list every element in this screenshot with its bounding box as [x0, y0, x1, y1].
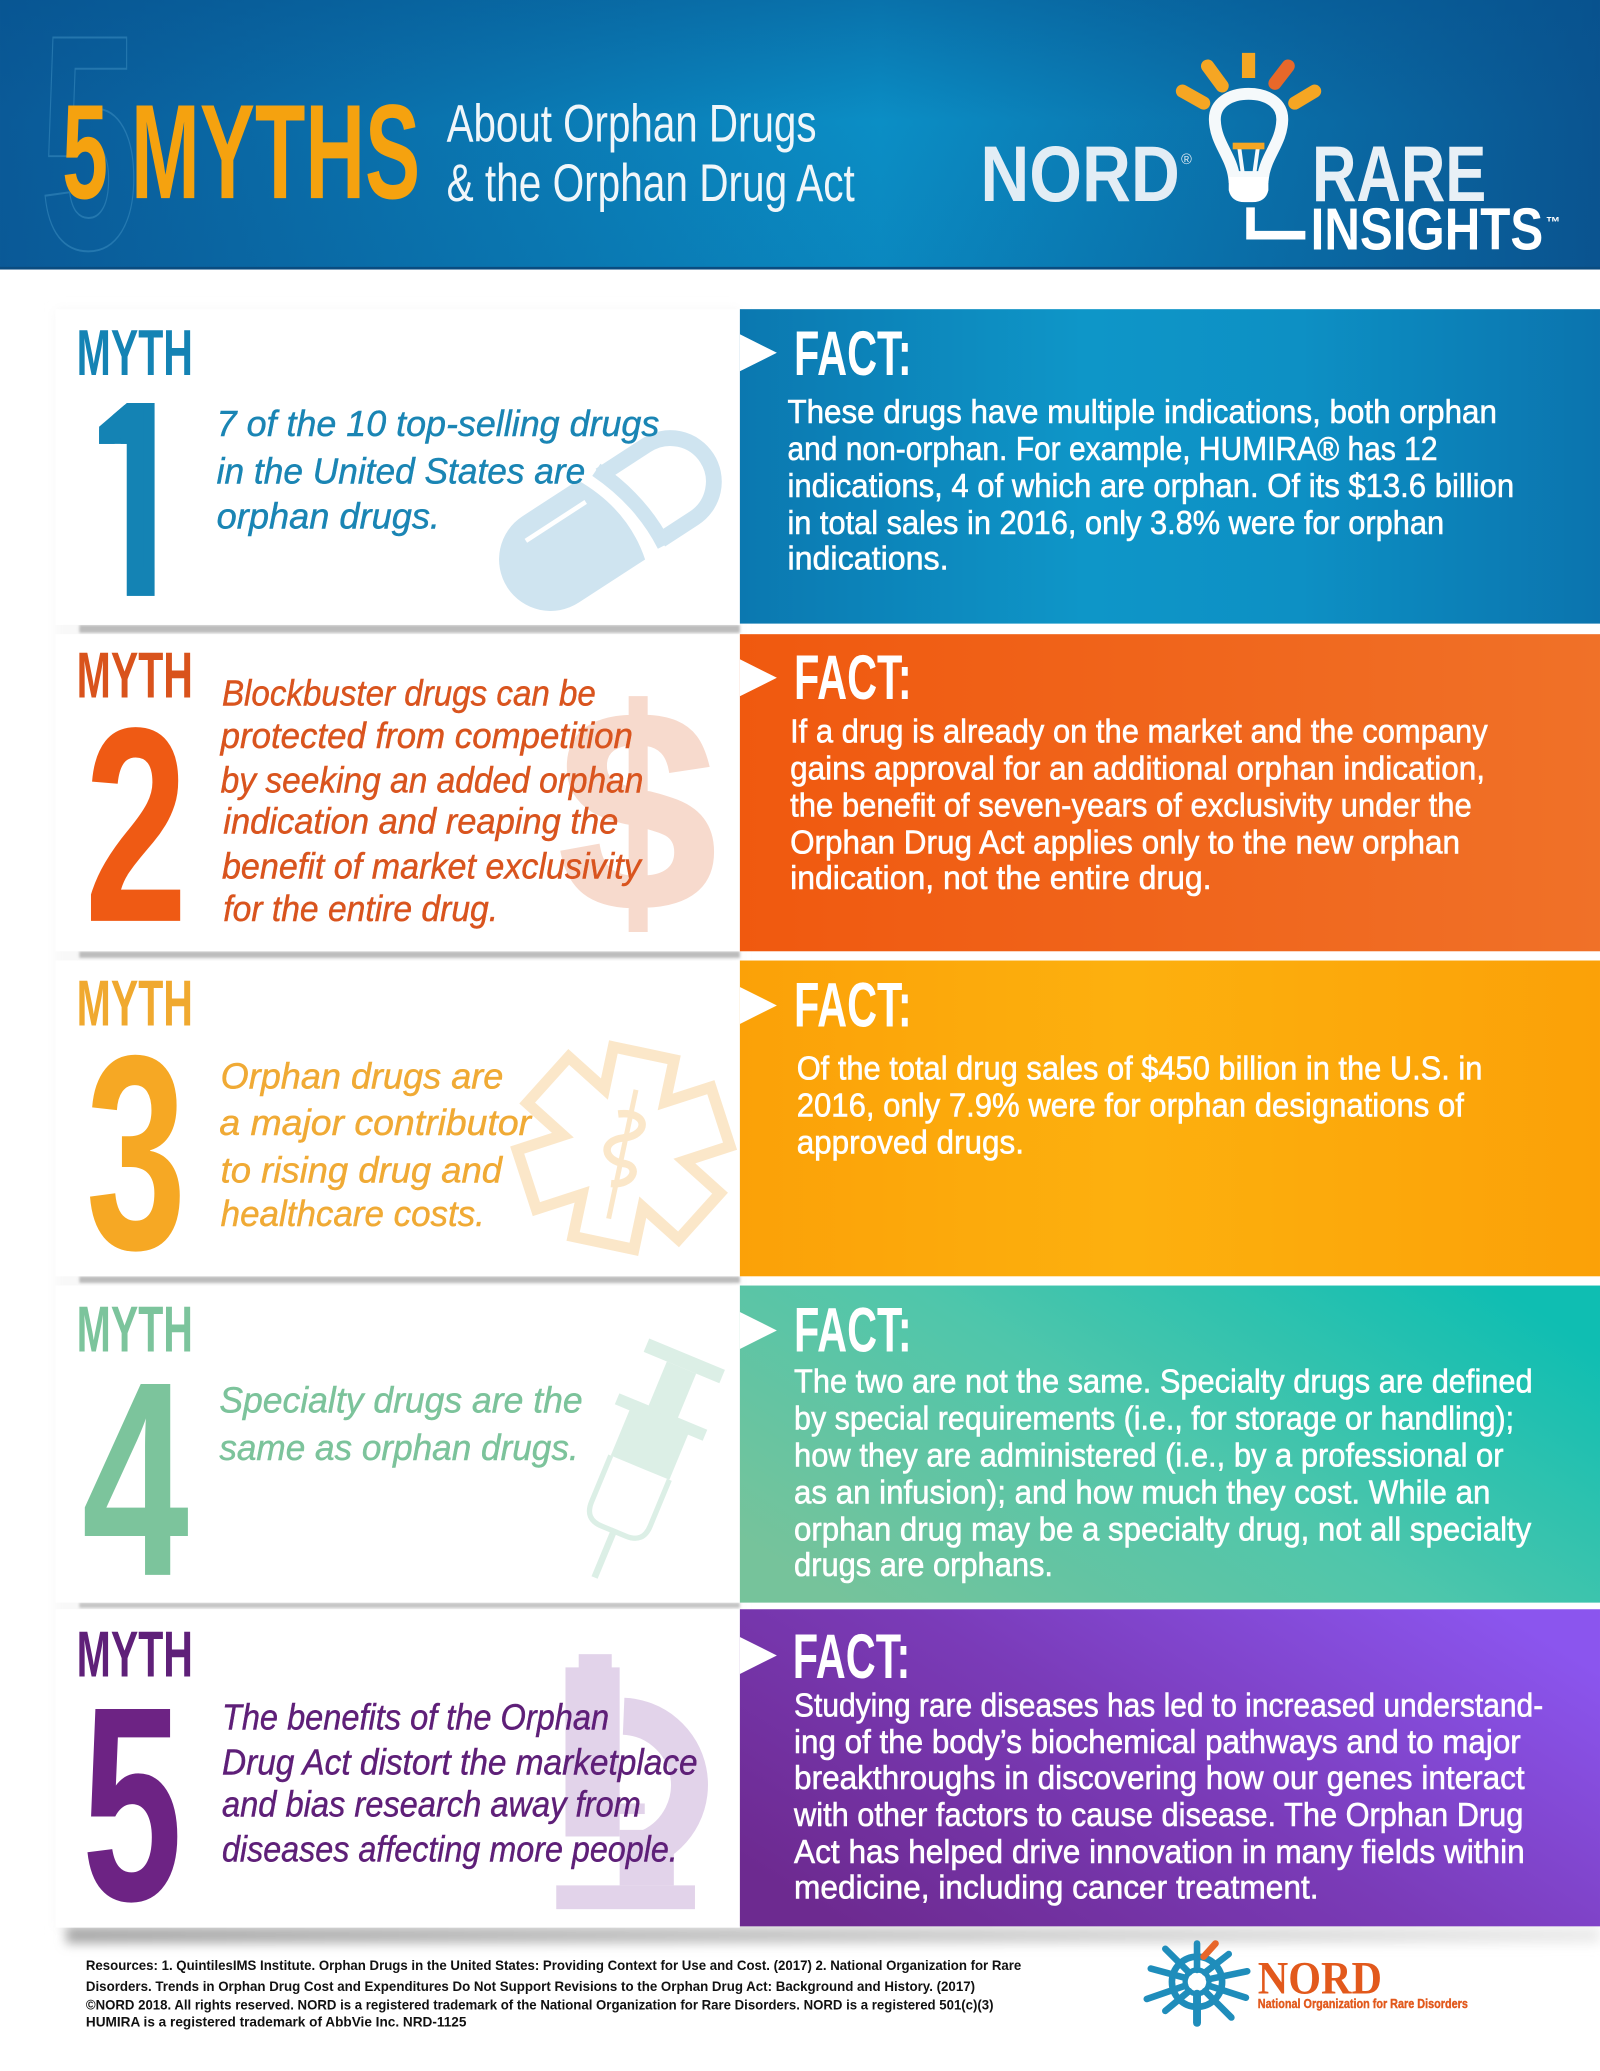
panel: myth 5 — [55, 1609, 740, 1959]
fact text: with other factors to cause disease. The Orphan Drug — [793, 1796, 1523, 1833]
myth text: healthcare costs. — [221, 1194, 485, 1234]
myth text — [222, 1697, 698, 1870]
number 3: 3 — [86, 998, 186, 1308]
fact heading: FACT: — [794, 319, 912, 389]
myth text: a major contributor — [219, 1103, 533, 1143]
shadows under myth panels — [55, 309, 1600, 1944]
myth label: MYTH — [77, 966, 193, 1039]
icon: syringe — [551, 1336, 731, 1596]
fact text: medicine, including cancer treatment. — [794, 1869, 1319, 1906]
myth text — [219, 1380, 583, 1468]
fact text: breakthroughs in discovering how our genes interact — [794, 1759, 1525, 1796]
subtitle: & the Orphan Drug Act — [447, 154, 855, 213]
fact text: Of the total drug sales of $450 billion in the U.S. in — [797, 1049, 1482, 1086]
number 4: 4 — [82, 1324, 190, 1634]
myth text: indication and reaping the — [223, 802, 618, 842]
icon: pill — [479, 415, 735, 631]
NORD Rare Insights logo: ® — [1181, 152, 1192, 168]
fact text: If a drug is already on the market and the company — [790, 713, 1488, 750]
panel: myth 2 — [55, 634, 740, 980]
fact text: gains approval for an additional orphan indication, — [790, 750, 1485, 787]
footer references: ©NORD 2018. All rights reserved. NORD is a registered trademark of the National Organization for Rare Disorders. NORD is a registered 501(c)(3) — [86, 1997, 994, 2013]
fact text: Studying rare diseases has led to increased understand- — [794, 1686, 1543, 1723]
fact text: how they are administered (i.e., by a professional or — [794, 1437, 1504, 1474]
myth text: protected from competition — [220, 716, 633, 756]
arrow — [740, 334, 777, 371]
fact text: in total sales in 2016, only 3.8% were for orphan — [787, 504, 1444, 541]
NORD footer logo — [1147, 1944, 1468, 2023]
myth text: Orphan drugs are — [221, 1057, 503, 1097]
myth text: same as orphan drugs. — [219, 1428, 579, 1468]
fact text: as an infusion); and how much they cost. While an — [794, 1474, 1490, 1511]
footer references: Disorders. Trends in Orphan Drug Cost and Expenditures Do Not Support Revisions to the Orphan Drug Act: Background and History. (2017) — [86, 1978, 975, 1994]
NORD footer logo: National Organization for Rare Disorders — [1258, 1997, 1468, 2011]
subtitle: About Orphan Drugs — [447, 94, 817, 153]
footer references — [86, 1957, 1022, 2030]
header banner — [0, 0, 1600, 313]
number 2: 2 — [85, 670, 188, 980]
arrow — [740, 1637, 777, 1674]
fact text — [793, 1686, 1543, 1906]
icon: light bulb — [1182, 53, 1315, 235]
myth text: 7 of the 10 top-selling drugs — [217, 404, 659, 444]
fact heading: FACT: — [794, 971, 912, 1041]
myth text: Blockbuster drugs can be — [222, 674, 596, 714]
footer references: HUMIRA is a registered trademark of AbbVie Inc. NRD-1125 — [86, 2014, 467, 2030]
icon: dollar sign: $ — [559, 653, 716, 970]
myth text: Drug Act distort the marketplace — [222, 1742, 698, 1782]
fact text: the benefit of seven-years of exclusivity under the — [790, 787, 1472, 824]
NORD Rare Insights logo — [980, 53, 1560, 263]
fact text: Orphan Drug Act applies only to the new orphan — [790, 824, 1460, 861]
panel: fact 5 — [740, 1609, 1600, 1926]
fact text — [797, 1049, 1482, 1160]
myth label: MYTH — [77, 639, 193, 712]
myth text: The benefits of the Orphan — [222, 1697, 609, 1737]
myth text: for the entire drug. — [223, 889, 498, 929]
fact text: and non-orphan. For example, HUMIRA® has 12 — [787, 430, 1437, 467]
myth label: MYTH — [77, 1293, 193, 1366]
myth label: MYTH — [77, 1618, 193, 1691]
number 1: 1 — [82, 345, 174, 655]
fact text: drugs are orphans. — [794, 1546, 1053, 1583]
number 5: 5 — [82, 1649, 182, 1959]
fact heading: FACT: — [794, 1296, 912, 1366]
fact text — [790, 713, 1488, 896]
panel: fact 2 — [740, 634, 1600, 951]
myth text: to rising drug and — [221, 1150, 503, 1190]
myth text: benefit of market exclusivity — [222, 847, 643, 887]
myth text: and bias research away from — [222, 1785, 641, 1825]
panel: myth 1 — [78, 330, 740, 625]
fact text: approved drugs. — [797, 1123, 1024, 1160]
fact text: 2016, only 7.9% were for orphan designations of — [797, 1086, 1465, 1123]
fact heading: FACT: — [794, 643, 912, 713]
myth text — [219, 1057, 533, 1234]
footer references: Resources: 1. QuintilesIMS Institute. Orphan Drugs in the United States: Providing Context for Use and Cost. (2017) 2. National Organization for Rare — [86, 1957, 1022, 1973]
panel: fact 3 — [740, 961, 1600, 1276]
myth text — [217, 404, 659, 536]
myth text: diseases affecting more people. — [222, 1830, 678, 1870]
fact text: indications, 4 of which are orphan. Of its $13.6 billion — [787, 467, 1514, 504]
fact text — [794, 1363, 1533, 1583]
panel: fact 4 — [740, 1286, 1600, 1603]
NORD Rare Insights logo: NORD — [980, 129, 1180, 218]
myth text: orphan drugs. — [217, 496, 440, 536]
icon: microscope — [556, 1654, 695, 1909]
panel: fact 1 — [740, 309, 1600, 624]
title: 5 myths: 5 MYTHS — [62, 76, 420, 227]
NORD Rare Insights logo: RARE — [1312, 129, 1486, 218]
fact text: orphan drug may be a specialty drug, not all specialty — [794, 1511, 1532, 1548]
fact text — [787, 393, 1514, 576]
myth text: Specialty drugs are the — [219, 1380, 583, 1420]
panel: myth 4 — [55, 1286, 740, 1634]
icon: star of life — [502, 1032, 745, 1264]
fact text: ing of the body’s biochemical pathways and to major — [794, 1723, 1521, 1760]
fact text: The two are not the same. Specialty drugs are defined — [794, 1363, 1533, 1400]
number 1 — [99, 403, 155, 596]
icon: network snowflake — [1147, 1944, 1247, 2023]
myth label: MYTH — [77, 316, 193, 389]
arrow — [740, 987, 777, 1024]
fact text: Act has helped drive innovation in many fields within — [794, 1833, 1525, 1870]
fact text: indication, not the entire drug. — [790, 859, 1212, 896]
NORD footer logo: NORD — [1258, 1954, 1382, 2005]
fact text: These drugs have multiple indications, both orphan — [787, 393, 1497, 430]
panel: myth 3 — [55, 961, 745, 1308]
NORD Rare Insights logo: INSIGHTS — [1311, 196, 1543, 263]
fact text: indications. — [787, 539, 949, 576]
NORD Rare Insights logo: ™ — [1546, 215, 1560, 231]
fact heading: FACT: — [793, 1622, 910, 1692]
arrow — [740, 659, 777, 696]
myth text — [220, 674, 643, 929]
myth text: in the United States are — [217, 452, 585, 492]
subtitle — [447, 94, 855, 213]
myth text: by seeking an added orphan — [221, 761, 643, 801]
arrow — [740, 1312, 777, 1349]
fact text: by special requirements (i.e., for storage or handling); — [794, 1400, 1514, 1437]
